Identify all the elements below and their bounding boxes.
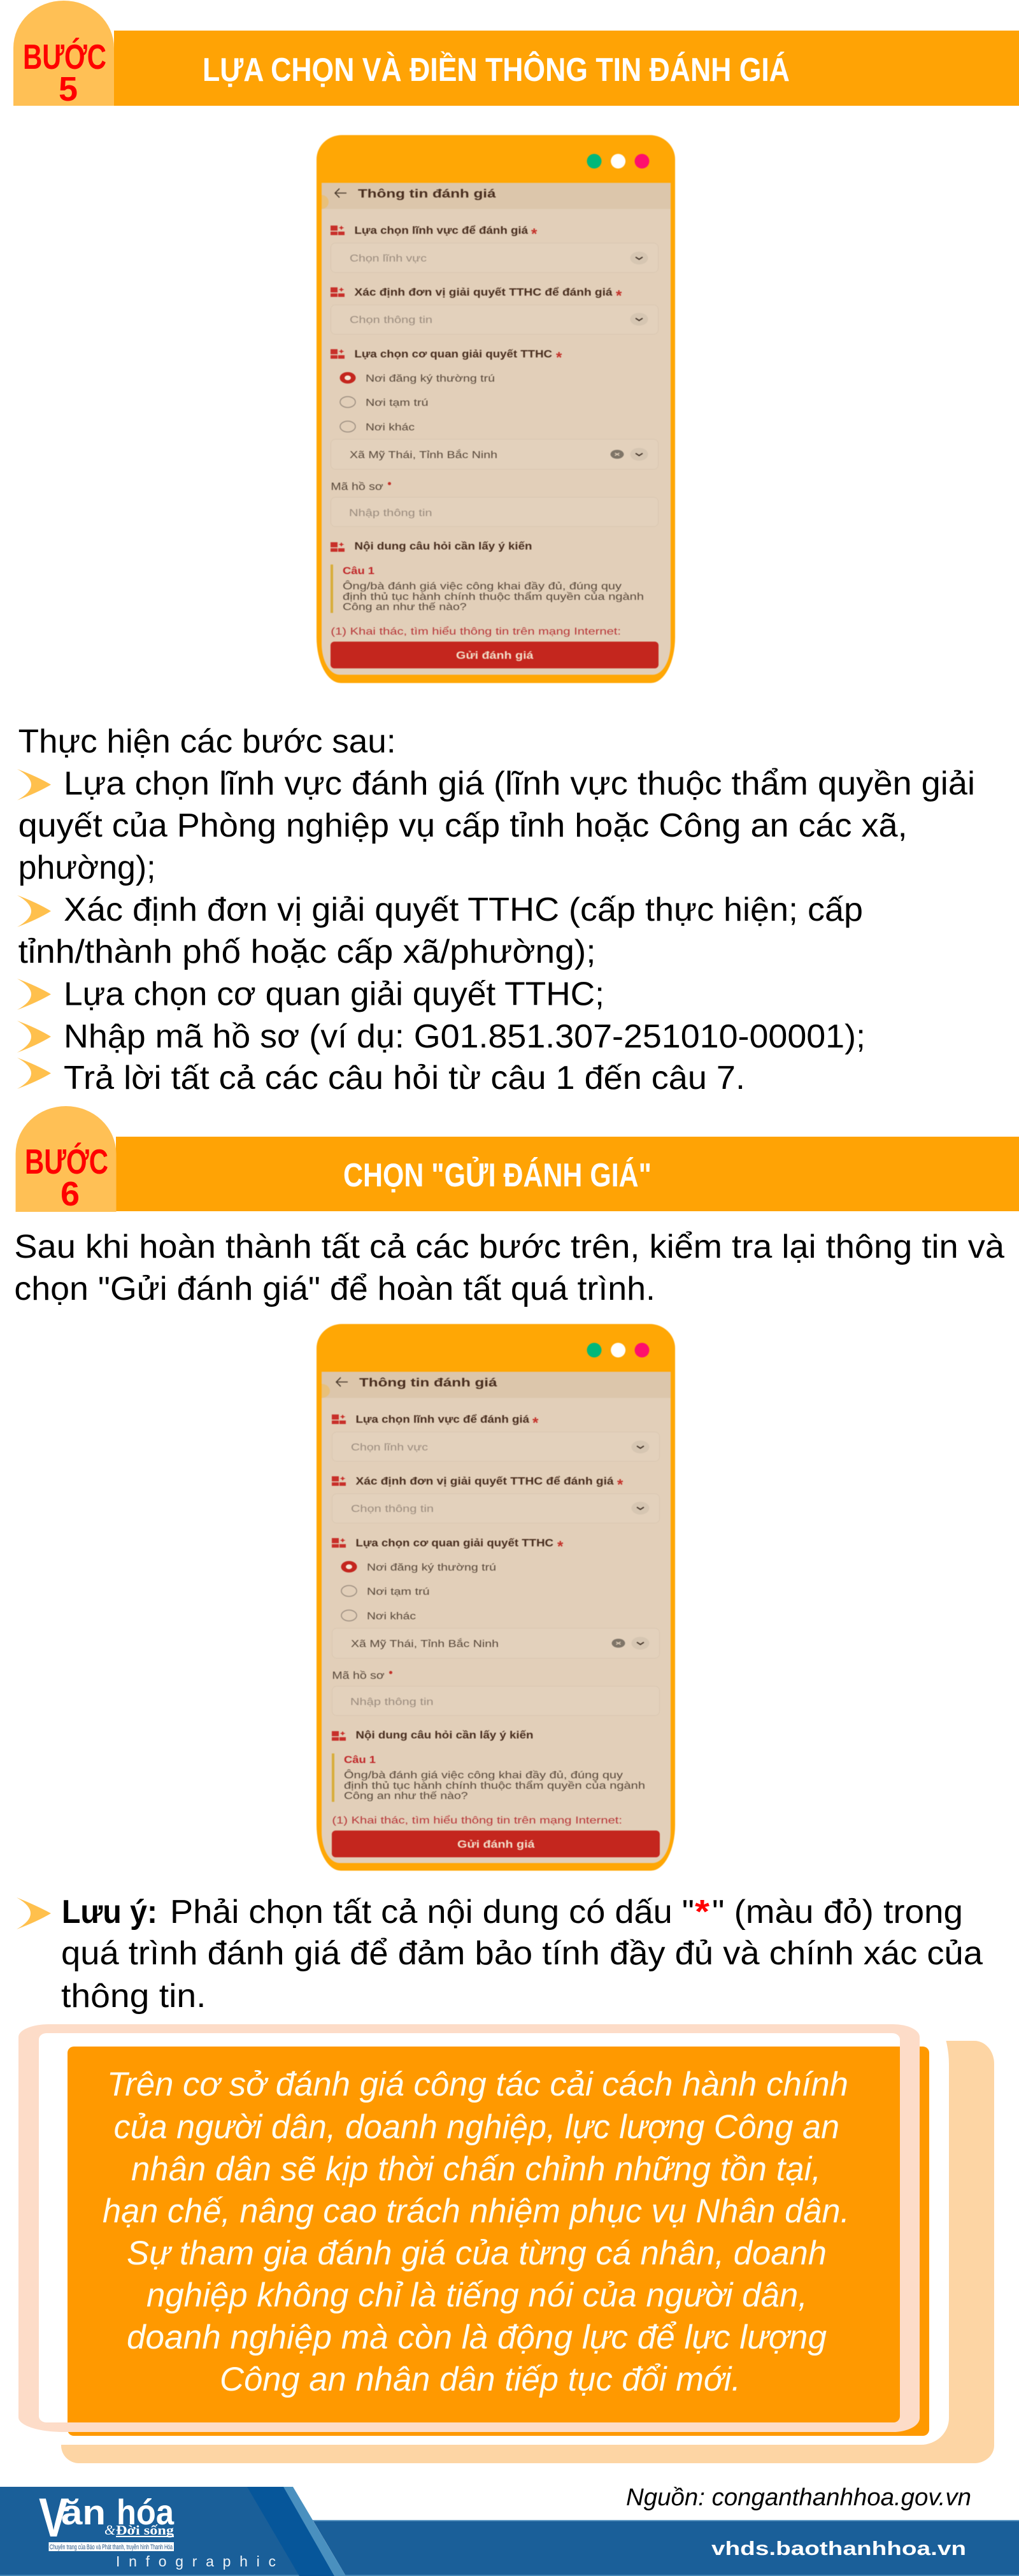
phone mockup: step 5: * bbox=[531, 226, 538, 243]
note: required fields: quá trình đánh giá để đảm bảo tính đầy đủ và chính xác của bbox=[61, 1935, 983, 1972]
phone mockup: step 5: Nơi đăng ký thường trú bbox=[366, 373, 495, 384]
logo: & bbox=[104, 2522, 116, 2538]
phone mockup: step 6: Nơi đăng ký thường trú bbox=[367, 1562, 496, 1573]
phone mockup: step 5: Công an như thế nào? bbox=[343, 602, 467, 613]
phone mockup: step 6: Chọn thông tin bbox=[351, 1504, 434, 1515]
phone mockup: step 6: Mã hồ sơ bbox=[332, 1670, 385, 1681]
step 5 header: LỰA CHỌN VÀ ĐIỀN THÔNG TIN ĐÁNH GIÁ bbox=[203, 51, 790, 89]
phone mockup: step 5: Mã hồ sơ bbox=[331, 481, 383, 493]
phone mockup: step 6: Ông/bà đánh giá việc công khai đầy đủ, đúng quy bbox=[344, 1770, 623, 1781]
bullet arrow 4 bbox=[17, 1021, 51, 1053]
callout text: hạn chế, nâng cao trách nhiệm phục vụ Nhân dân. bbox=[103, 2192, 850, 2230]
phone mockup: step 5: Chọn lĩnh vực bbox=[350, 254, 427, 264]
callout text: doanh nghiệp mà còn là động lực để lực lượng bbox=[127, 2319, 827, 2356]
bullet arrow 2 bbox=[17, 895, 51, 927]
phone mockup: step 5: định thủ tục hành chính thuộc thẩm quyền của ngành bbox=[343, 592, 644, 603]
phone mockup: step 5: Câu 1 bbox=[343, 566, 374, 577]
phone mockup: step 5: Xã Mỹ Thái, Tỉnh Bắc Ninh bbox=[350, 450, 497, 461]
phone mockup: step 6: (1) Khai thác, tìm hiểu thông tin trên mạng Internet: bbox=[332, 1815, 622, 1826]
note: required fields: thông tin. bbox=[61, 1978, 206, 2015]
step 6 header bbox=[15, 1106, 1019, 1213]
logo bbox=[39, 2487, 276, 2570]
phone mockup: step 6: Lựa chọn lĩnh vực để đánh giá bbox=[355, 1414, 530, 1425]
callout text: của người dân, doanh nghiệp, lực lượng Công an bbox=[114, 2108, 839, 2146]
phone mockup: step 6: Gửi đánh giá bbox=[457, 1839, 535, 1850]
step 5 instructions: Nhập mã hồ sơ (ví dụ: G01.851.307-251010-00001); bbox=[64, 1018, 866, 1055]
step 5 instructions bbox=[17, 723, 975, 1097]
bullet arrow 3 bbox=[17, 979, 51, 1010]
logo: Đời sống bbox=[116, 2522, 175, 2538]
footer band bbox=[0, 2487, 1019, 2576]
phone mockup: step 5: Gửi đánh giá bbox=[456, 650, 534, 661]
step 5 header: 5 bbox=[59, 70, 78, 108]
logo: ăn bbox=[61, 2493, 106, 2532]
phone mockup: step 6: Nơi tạm trú bbox=[367, 1587, 429, 1597]
phone mockup: step 5 bbox=[317, 135, 675, 683]
phone mockup: step 5: Lựa chọn cơ quan giải quyết TTHC bbox=[354, 349, 552, 360]
phone mockup: step 5: * bbox=[616, 287, 622, 305]
phone mockup: step 5: * bbox=[556, 349, 562, 366]
phone mockup: step 6: định thủ tục hành chính thuộc thẩm quyền của ngành bbox=[344, 1781, 645, 1792]
phone mockup: step 6: * bbox=[557, 1538, 564, 1555]
phone mockup: step 6: Công an như thế nào? bbox=[344, 1791, 468, 1802]
step 5 instructions: Lựa chọn lĩnh vực đánh giá (lĩnh vực thuộc thẩm quyền giải bbox=[64, 765, 975, 802]
phone mockup: step 5: Xác định đơn vị giải quyết TTHC để đánh giá bbox=[354, 287, 613, 298]
phone mockup: step 6: Thông tin đánh giá bbox=[359, 1376, 497, 1389]
logo: Infographic bbox=[116, 2553, 276, 2570]
phone mockup: step 5: Nhập thông tin bbox=[349, 508, 432, 519]
step 5 header bbox=[13, 1, 1019, 108]
step 5 instructions: Lựa chọn cơ quan giải quyết TTHC; bbox=[64, 976, 604, 1013]
step 5 instructions: Thực hiện các bước sau: bbox=[18, 723, 396, 760]
phone mockup: step 5: Thông tin đánh giá bbox=[358, 187, 496, 200]
source credit: Nguồn: conganthanhhoa.gov.vn bbox=[626, 2484, 971, 2511]
step 6 header: CHỌN "GỬI ĐÁNH GIÁ" bbox=[343, 1156, 652, 1194]
phone mockup: step 5: Nội dung câu hỏi cần lấy ý kiến bbox=[354, 541, 532, 552]
phone mockup: step 5: (1) Khai thác, tìm hiểu thông tin trên mạng Internet: bbox=[331, 626, 621, 637]
phone mockup: step 6: Nơi khác bbox=[367, 1611, 416, 1622]
callout text: Sự tham gia đánh giá của từng cá nhân, doanh bbox=[127, 2234, 827, 2272]
callout text: Trên cơ sở đánh giá công tác cải cách hành chính bbox=[107, 2066, 848, 2103]
step 5 header: BƯỚC bbox=[23, 37, 106, 76]
bullet arrow 5 bbox=[17, 1058, 51, 1089]
step 5 instructions: phường); bbox=[18, 849, 156, 886]
step 6 description bbox=[14, 1228, 1004, 1307]
logo: Chuyên trang của Báo và Phát thanh, truyền hình Thanh Hóa bbox=[50, 2544, 173, 2551]
phone mockup: step 5: Lựa chọn lĩnh vực để đánh giá bbox=[354, 225, 529, 236]
phone mockup: step 5: Nơi tạm trú bbox=[366, 398, 428, 408]
step 5 instructions: tỉnh/thành phố hoặc cấp xã/phường); bbox=[18, 933, 596, 970]
phone mockup: step 6: Lựa chọn cơ quan giải quyết TTHC bbox=[355, 1537, 553, 1549]
logo: hóa bbox=[117, 2492, 175, 2532]
step 5 instructions: quyết của Phòng nghiệp vụ cấp tỉnh hoặc Công an các xã, bbox=[18, 807, 908, 844]
note: required fields: " (màu đỏ) trong bbox=[712, 1894, 963, 1931]
step 5 instructions: Trả lời tất cả các câu hỏi từ câu 1 đến câu 7. bbox=[64, 1060, 745, 1097]
phone mockup: step 6: Nhập thông tin bbox=[350, 1697, 434, 1708]
logo: V bbox=[39, 2487, 68, 2549]
phone mockup: step 6: * bbox=[532, 1414, 539, 1432]
callout text: nhân dân sẽ kịp thời chấn chỉnh những tồn tại, bbox=[131, 2150, 821, 2188]
note: required fields bbox=[17, 1894, 983, 2015]
phone mockup: step 6: Nội dung câu hỏi cần lấy ý kiến bbox=[355, 1730, 534, 1741]
step 6 header: BƯỚC bbox=[25, 1142, 108, 1181]
phone mockup: step 5: Chọn thông tin bbox=[350, 315, 432, 326]
note: required fields: Lưu ý: bbox=[62, 1894, 157, 1931]
phone mockup: step 5: Ông/bà đánh giá việc công khai đầy đủ, đúng quy bbox=[343, 581, 622, 592]
phone mockup: step 6: Chọn lĩnh vực bbox=[351, 1443, 428, 1453]
phone mockup: step 6: Xã Mỹ Thái, Tỉnh Bắc Ninh bbox=[351, 1639, 499, 1650]
step 5 instructions: Xác định đơn vị giải quyết TTHC (cấp thực hiện; cấp bbox=[64, 891, 863, 928]
website url: vhds.baothanhhoa.vn bbox=[711, 2537, 966, 2559]
phone mockup: step 6: Xác định đơn vị giải quyết TTHC để đánh giá bbox=[355, 1476, 614, 1487]
phone mockup: step 6 bbox=[317, 1324, 675, 1871]
callout panel bbox=[18, 2020, 994, 2463]
callout text: nghiệp không chỉ là tiếng nói của người dân, bbox=[146, 2277, 808, 2314]
note: required fields: Phải chọn tất cả nội dung có dấu " bbox=[170, 1894, 694, 1931]
phone mockup: step 5: Nơi khác bbox=[366, 422, 415, 433]
step 6 header: 6 bbox=[61, 1175, 80, 1213]
callout text bbox=[103, 2066, 850, 2398]
step 6 description: Sau khi hoàn thành tất cả các bước trên, kiểm tra lại thông tin và bbox=[14, 1228, 1004, 1265]
step 6 description: chọn "Gửi đánh giá" để hoàn tất quá trình. bbox=[14, 1270, 655, 1307]
callout text: Công an nhân dân tiếp tục đổi mới. bbox=[220, 2361, 741, 2398]
phone mockup: step 6: * bbox=[617, 1476, 624, 1493]
phone mockup: step 6: Câu 1 bbox=[344, 1755, 376, 1766]
note: required fields: * bbox=[695, 1894, 710, 1931]
bullet arrow 1 bbox=[17, 769, 51, 800]
